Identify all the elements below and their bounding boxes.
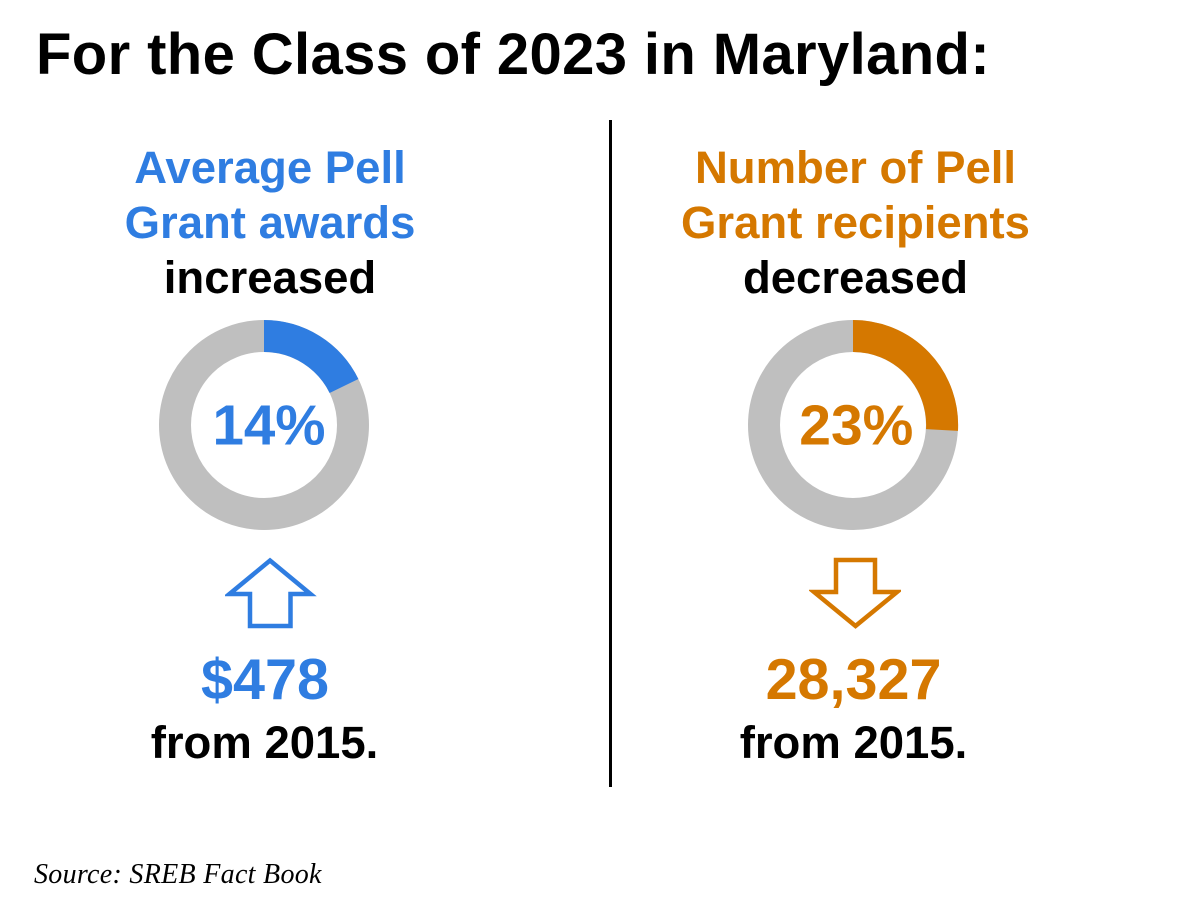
heading: number of pell grant recipients: Number of Pell <box>695 142 1016 193</box>
text: from 2015: from 2015. <box>740 716 967 768</box>
center divider <box>609 120 612 787</box>
donut chart: 14%: 14% <box>212 394 326 456</box>
heading: average pell grant awards <box>125 142 415 303</box>
value: $478: $478 <box>201 648 329 712</box>
icon: down arrow <box>809 558 901 629</box>
donut chart: 14% <box>159 320 369 530</box>
panel: number of pell grant recipients <box>681 142 1030 768</box>
panel: average pell grant awards <box>125 142 415 768</box>
source note: Source: SREB Fact Book <box>34 858 322 890</box>
heading: average pell grant awards: Average Pell <box>134 142 406 193</box>
title: For the Class of 2023 in Maryland: <box>36 22 990 87</box>
donut chart: 23%: 23% <box>799 394 913 458</box>
heading: number of pell grant recipients <box>681 142 1030 303</box>
heading: average pell grant awards: increased <box>164 252 376 303</box>
heading: average pell grant awards: Grant awards <box>125 197 415 248</box>
icon: up arrow <box>225 558 317 628</box>
value: 28,327: 28,327 <box>766 648 941 712</box>
heading: number of pell grant recipients: decreased <box>743 252 968 303</box>
heading: number of pell grant recipients: Grant recipients <box>681 197 1030 248</box>
donut chart: 23% <box>748 320 958 530</box>
text: from 2015: from 2015. <box>151 716 378 768</box>
